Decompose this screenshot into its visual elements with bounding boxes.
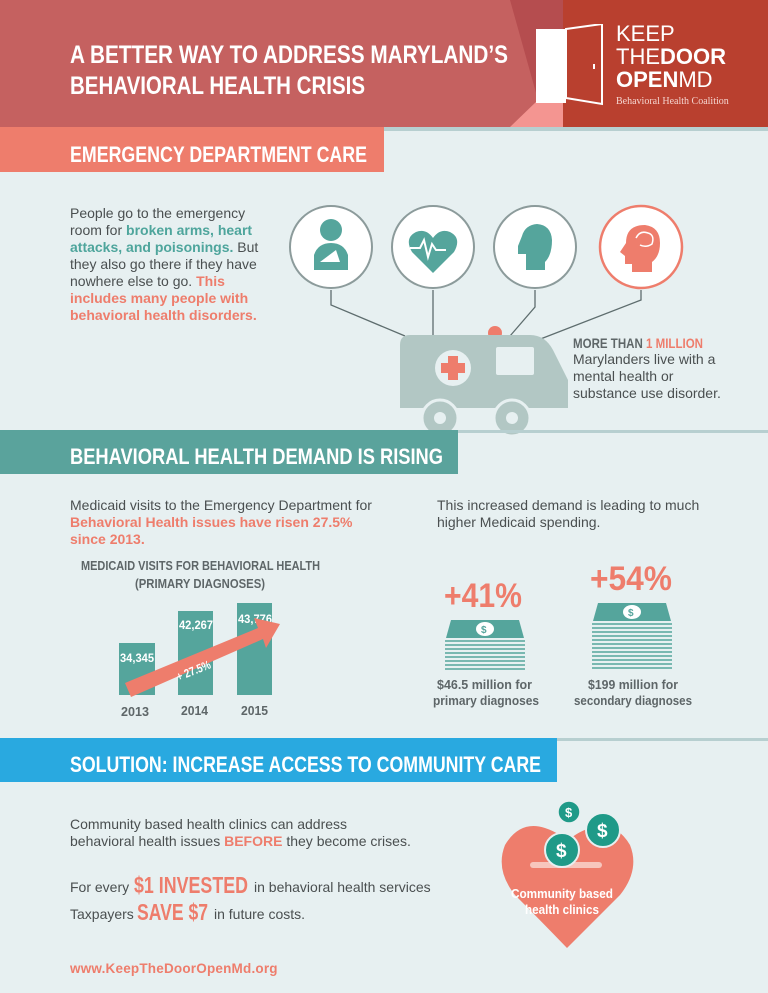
logo: Behavioral Health Coalition <box>616 96 729 107</box>
heart piggy bank: $ <box>556 841 567 862</box>
bar chart: + 27.5% <box>174 657 213 684</box>
logo: OPENMD <box>616 67 713 92</box>
logo: KEEP <box>616 21 675 46</box>
heart piggy bank: $ <box>565 805 573 820</box>
invest text: SAVE $7 <box>137 899 208 925</box>
invest text: in future costs. <box>214 906 305 922</box>
logo <box>536 21 729 107</box>
heart piggy bank: health clinics <box>525 902 599 917</box>
solution text: behavioral health issues BEFORE they become crises. <box>70 833 411 849</box>
heart piggy bank: Community based <box>511 886 613 901</box>
bar chart: 2015 <box>241 703 268 718</box>
spending stat: +54% <box>574 560 692 708</box>
invest text: in behavioral health services <box>254 879 431 895</box>
bar chart: 2014 <box>181 703 209 718</box>
title <box>70 41 508 100</box>
spending stat: +54%: $199 million for <box>588 677 678 692</box>
bar chart: (PRIMARY DIAGNOSES) <box>135 576 265 591</box>
title: BEHAVIORAL HEALTH CRISIS <box>70 72 365 100</box>
invest text <box>70 872 431 925</box>
logo: THEDOOR <box>616 44 726 69</box>
solution text: Community based health clinics can address <box>70 816 347 832</box>
section bar: solution <box>0 738 768 741</box>
spending stat: +54%: $ <box>628 608 634 619</box>
spending stat: +41%: $ <box>481 625 487 636</box>
solution text <box>70 816 411 849</box>
heart piggy bank: $ <box>597 821 608 842</box>
stat callout: Marylanders live with a mental health or substance use disorder. <box>573 351 721 401</box>
spending stat: +41%: +41% <box>444 577 522 615</box>
invest text: $1 INVESTED <box>134 872 248 898</box>
demand text right: This increased demand is leading to much higher Medicaid spending. <box>437 497 699 530</box>
bar chart: 43,776 <box>238 612 272 626</box>
section bar: demand <box>0 430 768 433</box>
bar chart: 42,267 <box>179 618 213 632</box>
section bar: emergency <box>0 127 768 131</box>
bar chart: 34,345 <box>120 651 154 665</box>
heart piggy bank <box>502 802 634 948</box>
bar chart <box>81 558 320 719</box>
invest text: Taxpayers <box>70 906 134 922</box>
invest text: For every <box>70 879 129 895</box>
website: www.KeepTheDoorOpenMd.org <box>70 961 278 976</box>
title: A BETTER WAY TO ADDRESS MARYLAND’S <box>70 41 508 69</box>
spending stat: +41%: primary diagnoses <box>433 693 539 708</box>
ambulance illustration <box>289 204 684 434</box>
stat callout: MORE THAN 1 MILLION <box>573 335 703 351</box>
spending stat: +41% <box>433 577 539 708</box>
intro text: People go to the emergency room for broken arms, heart attacks, and poisonings. But they also go there if they have nowhere else to go. This includes many people with behavioral health disorders. <box>70 205 258 323</box>
demand text left: Medicaid visits to the Emergency Department for Behavioral Health issues have risen 27.5% since 2013. <box>70 497 372 547</box>
spending stat: +54%: +54% <box>590 560 672 598</box>
header banner <box>0 0 768 127</box>
bar chart: 2013 <box>121 704 149 719</box>
spending stat: +41%: $46.5 million for <box>437 677 532 692</box>
